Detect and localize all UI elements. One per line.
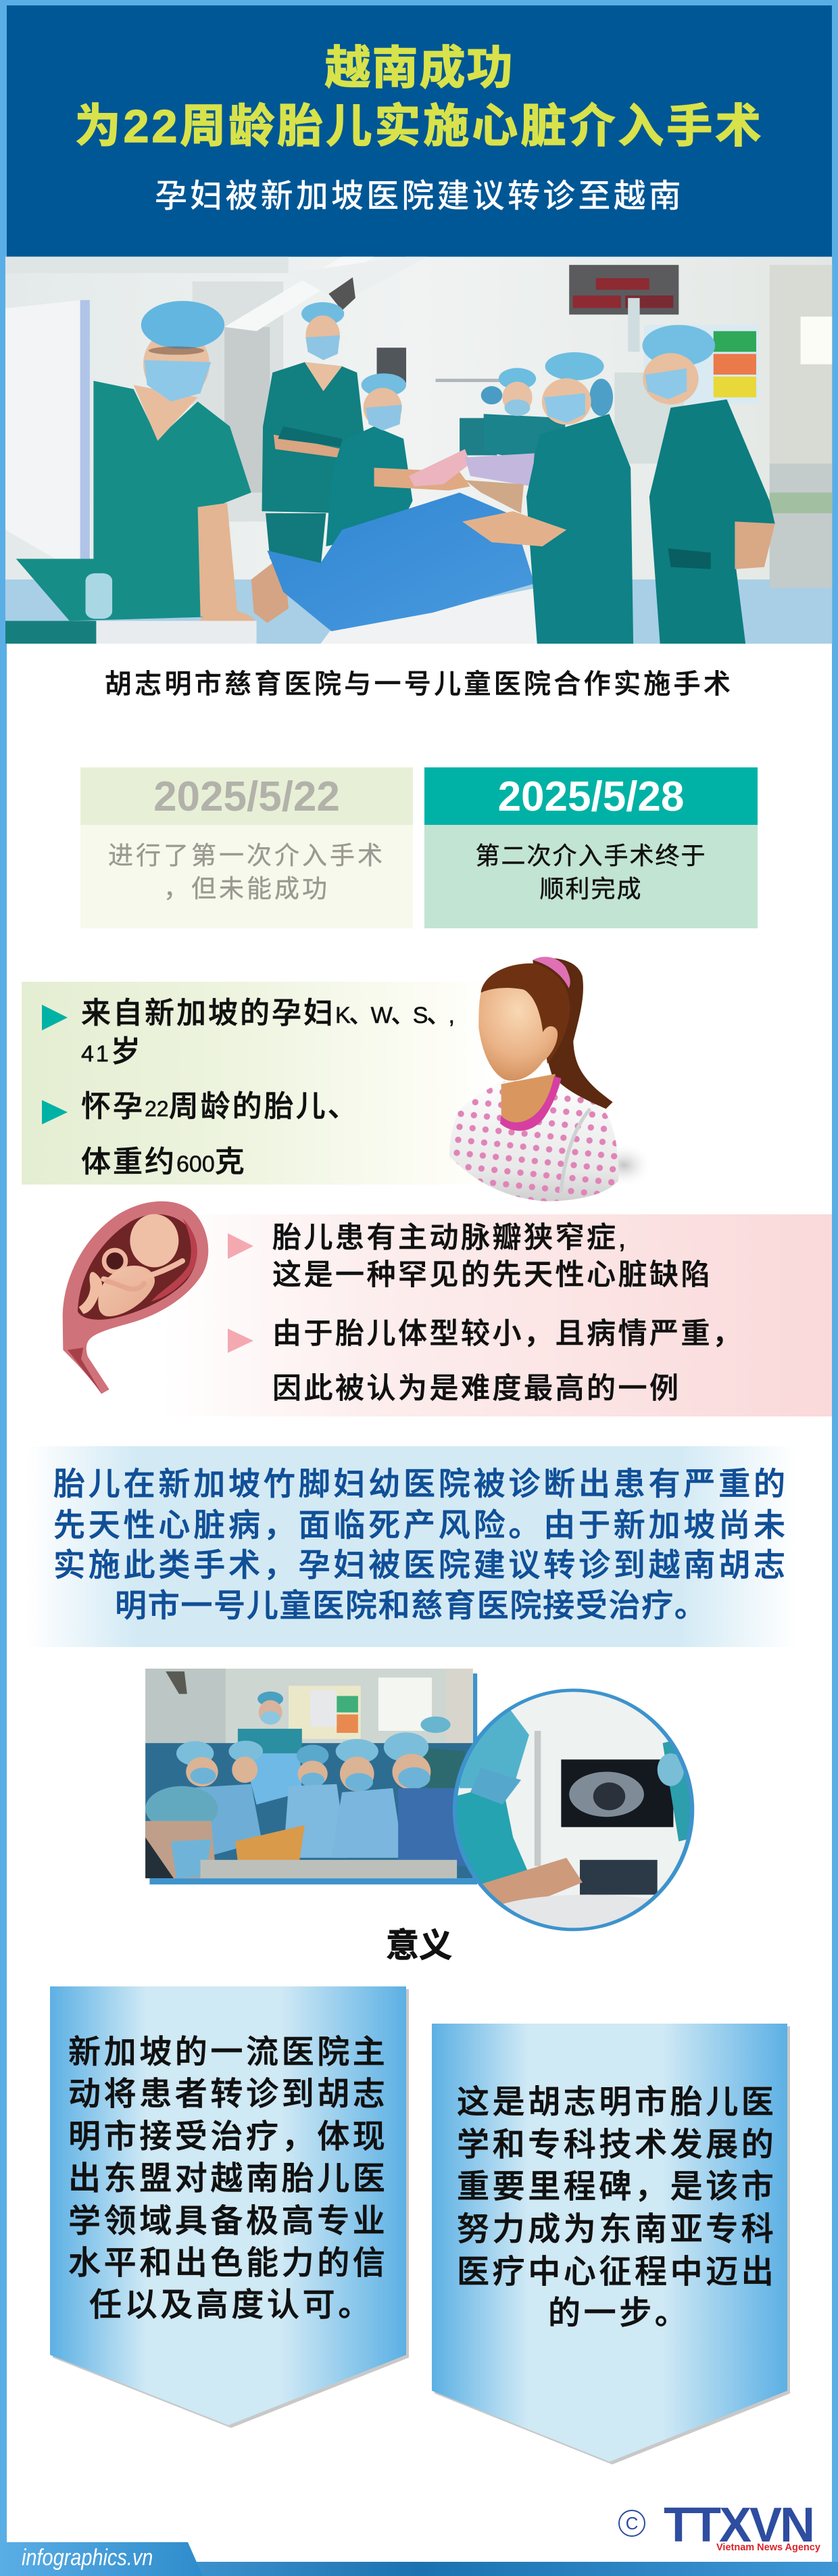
date description: 进行了第一次介入手术: [108, 842, 385, 869]
wordmark: TTXVN: [664, 2498, 813, 2552]
arrow: patient bullet 2: [42, 1100, 68, 1124]
panel: left significance card: [50, 1986, 409, 2428]
line 2: 学和专科技术发展的: [457, 2127, 777, 2163]
line 4: 努力成为东南亚专科: [457, 2212, 777, 2247]
date header: 2025/5/28: [498, 773, 684, 820]
line 4: 出东盟对越南胎儿医: [68, 2161, 388, 2197]
footer tab: [0, 2542, 203, 2576]
line 6: 水平和出色能力的信: [68, 2245, 388, 2281]
heading: significance: 意义: [386, 1928, 452, 1964]
date description: 顺利完成: [539, 875, 642, 903]
text: left card: [68, 2034, 388, 2323]
arrow: patient bullet 1: [42, 1005, 68, 1030]
title line 1: 越南成功: [324, 43, 514, 94]
date description: [108, 842, 385, 903]
text: diagnosis line 2: 这是一种罕见的先天性心脏缺陷: [272, 1259, 712, 1291]
text: diagnosis line 1: 胎儿患有主动脉瓣狭窄症,: [272, 1222, 628, 1254]
header banner: [7, 5, 832, 257]
date card: first attempt: [80, 767, 413, 928]
panel: right significance card: [432, 2024, 790, 2464]
text: fetal weight: 体重约600克: [81, 1145, 247, 1178]
text: severity line 2: 因此被认为是难度最高的一例: [272, 1373, 681, 1405]
date card: second attempt: [424, 767, 758, 928]
date description: [475, 842, 707, 903]
line 5: 医疗中心征程中迈出: [457, 2254, 777, 2290]
footer site name: infographics.vn: [22, 2545, 153, 2571]
arrow: fetal bullet 1: [228, 1233, 253, 1259]
agency name: Vietnam News Agency: [716, 2542, 820, 2553]
panel: patient facts: [22, 982, 495, 1185]
line 6: 的一步。: [548, 2295, 690, 2331]
text: narrative line 1: 胎儿在新加坡竹脚妇幼医院被诊断出患有严重的: [53, 1466, 789, 1502]
text: patient identity: 来自新加坡的孕妇K、W、S、,: [81, 997, 453, 1030]
text: narrative line 3: 实施此类手术，孕妇被医院建议转诊到越南胡志: [53, 1547, 789, 1583]
line 3: 明市接受治疗，体现: [68, 2119, 388, 2155]
line 1: 新加坡的一流医院主: [68, 2034, 388, 2070]
text: gestational age: 怀孕22周龄的胎儿、: [81, 1090, 360, 1123]
arrow: fetal bullet 2: [228, 1329, 253, 1353]
text: narrative line 2: 先天性心脏病，面临死产风险。由于新加坡尚未: [53, 1507, 789, 1543]
date description: 第二次介入手术终于: [475, 842, 707, 869]
caption: 胡志明市慈育医院与一号儿童医院合作实施手术: [105, 669, 733, 699]
text: patient age: 41岁: [81, 1035, 143, 1068]
text: severity line 1: 由于胎儿体型较小，且病情严重，: [272, 1318, 743, 1350]
copyright symbol: C: [626, 2513, 638, 2533]
line 1: 这是胡志明市胎儿医: [457, 2084, 777, 2120]
line 3: 重要里程碑，是该市: [457, 2169, 777, 2205]
icon: pregnant woman patient: [449, 957, 654, 1201]
line 7: 任以及高度认可。: [89, 2287, 374, 2323]
logo: copyright TTXVN: [618, 2498, 820, 2553]
photo: operating room team: [5, 257, 832, 644]
date header: 2025/5/22: [153, 773, 340, 820]
date header: [80, 767, 413, 825]
line 5: 学领域具备极高专业: [68, 2203, 388, 2239]
text: right card: [457, 2084, 777, 2331]
panel: background narrative: [27, 1446, 796, 1647]
text: narrative line 4: 明市一号儿童医院和慈育医院接受治疗。: [115, 1588, 708, 1623]
photo: surgical team with blue frame: [145, 1669, 695, 1936]
copyright symbol: [618, 2510, 645, 2537]
date description: ，但未能成功: [164, 875, 330, 903]
title line 2: 为22周龄胎儿实施心脏介入手术: [75, 101, 764, 152]
footer bar: [0, 2562, 838, 2576]
subtitle: 孕妇被新加坡医院建议转诊至越南: [155, 178, 684, 214]
line 2: 动将患者转诊到胡志: [68, 2076, 388, 2112]
panel: fetal condition: [162, 1214, 832, 1416]
icon: fetus in uterus: [63, 1201, 208, 1394]
date header: [424, 767, 758, 825]
